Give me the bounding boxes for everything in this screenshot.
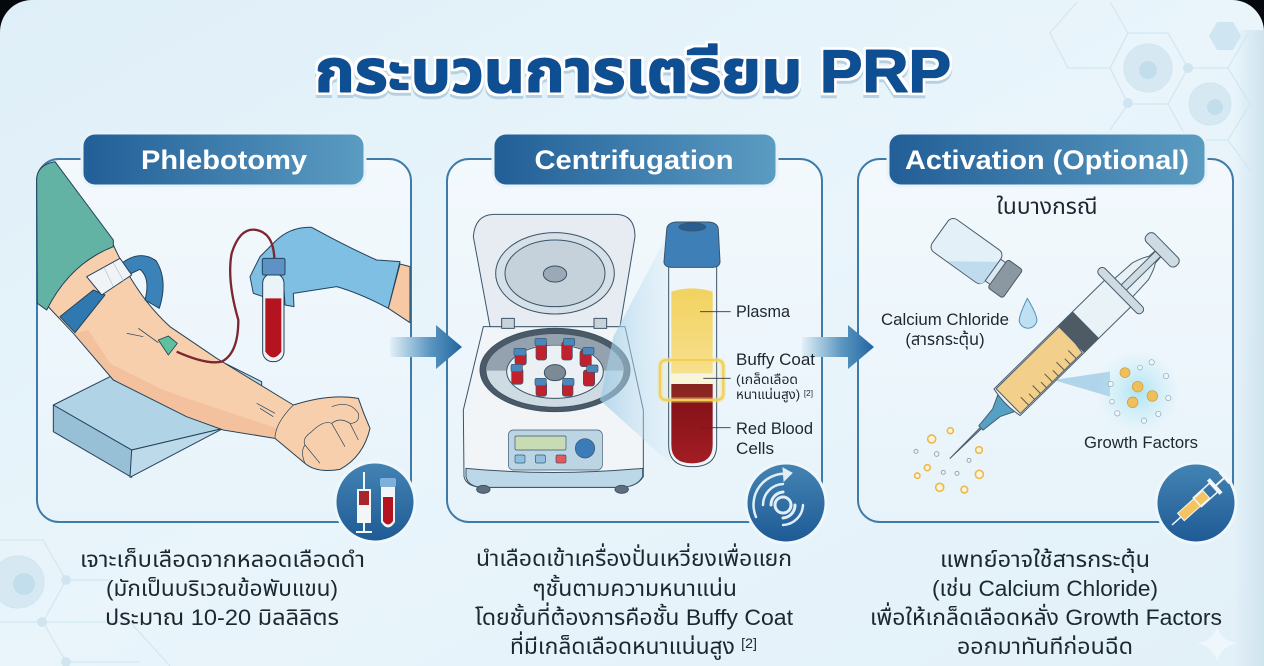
arm <box>47 245 370 470</box>
heading pill: Phlebotomy <box>82 133 365 186</box>
label: in some cases: ในบางกรณี <box>996 194 1098 219</box>
illustration: vial and syringe <box>914 216 1188 493</box>
blood collection tube <box>262 258 285 362</box>
label: Buffy Coat: หนาแน่นสูง) <box>736 387 799 402</box>
caption: phlebotomy: (มักเป็นบริเวณข้อพับแขน) <box>106 576 338 601</box>
caption: phlebotomy: เจาะเก็บเลือดจากหลอดเลือดดำ <box>80 546 365 572</box>
caption: activation: ออกมาทันทีก่อนฉีด <box>957 634 1133 659</box>
scattered growth factors <box>915 428 983 493</box>
caption: activation: แพทย์อาจใช้สารกระตุ้น <box>940 547 1150 573</box>
panel: activation <box>858 159 1236 543</box>
tourniquet <box>60 256 163 333</box>
hexagon cell pattern: bottom left <box>0 540 170 666</box>
heading pill: Centrifugation: Centrifugation <box>534 145 734 175</box>
growth factor glow <box>1097 350 1180 433</box>
label: Calcium Chloride: Calcium Chloride <box>881 311 1009 329</box>
label: Growth Factors: Growth Factors <box>1084 434 1198 452</box>
icon: spin badge <box>746 463 826 543</box>
gloved hand <box>250 227 400 308</box>
caption: phlebotomy <box>80 546 365 630</box>
hexagon cell pattern: top right <box>1050 2 1264 170</box>
panel: phlebotomy <box>37 159 415 542</box>
heading pill: Centrifugation <box>493 133 777 186</box>
forearm of clinician <box>388 264 410 323</box>
label: Plasma: Plasma <box>736 303 791 321</box>
caption: centrifugation: นำเลือดเข้าเครื่องปั่นเหวี่ยงเพื่อแยก <box>476 543 792 571</box>
syringe <box>929 224 1188 480</box>
centrifuge body <box>463 327 643 493</box>
label: Red Blood Cells <box>736 420 813 458</box>
panel: centrifugation <box>447 159 826 543</box>
rotor sample tubes <box>511 338 598 396</box>
caption: centrifugation: [2] <box>741 635 757 651</box>
vial <box>928 216 1024 300</box>
centrifuge lid <box>473 214 635 328</box>
fist knuckle lines <box>127 333 359 463</box>
icon: syringe badge <box>1156 463 1236 543</box>
caption: activation: (เช่น Calcium Chloride) <box>932 576 1158 601</box>
separated blood tube <box>664 222 720 467</box>
control panel <box>508 430 602 470</box>
rotor bowl <box>480 328 630 412</box>
illustration: centrifuge and tube <box>463 214 731 493</box>
butterfly needle <box>138 328 177 355</box>
decorative sparkle <box>1196 626 1238 662</box>
label: Buffy Coat <box>736 351 815 402</box>
zoom beam to growth factors <box>1053 372 1110 397</box>
arrow: phlebotomy to centrifugation <box>390 325 462 369</box>
title: กระบวนการเตรียม PRP <box>315 38 951 105</box>
arrow: centrifugation to activation <box>802 325 874 369</box>
label: Red Blood Cells: Cells <box>736 440 774 458</box>
buffy coat highlight <box>660 360 723 400</box>
zoom beam <box>600 230 670 463</box>
caption: centrifugation: ที่มีเกล็ดเลือดหนาแน่นสูง <box>510 634 732 659</box>
label: Calcium Chloride <box>881 311 1009 349</box>
caption: activation: เพื่อให้เกล็ดเลือดหลั่ง Growth Factors <box>870 602 1222 630</box>
label: Red Blood Cells: Red Blood <box>736 420 813 438</box>
drop <box>1019 298 1037 328</box>
heading pill: Phlebotomy: Phlebotomy <box>141 145 307 175</box>
tube cap <box>664 222 720 267</box>
label: Calcium Chloride: (สารกระตุ้น) <box>905 331 985 349</box>
caption: centrifugation: โดยชั้นที่ต้องการคือชั้น Buffy Coat <box>475 602 794 630</box>
icon: blood tube and syringe badge <box>335 462 415 542</box>
label: Buffy Coat: Buffy Coat <box>736 351 815 369</box>
heading pill: Activation (Optional) <box>888 133 1206 186</box>
caption: activation <box>870 547 1222 659</box>
illustration: arm with blood draw <box>37 162 410 477</box>
sleeve <box>37 162 113 310</box>
blood tubing <box>177 230 274 362</box>
caption: centrifugation <box>475 543 794 661</box>
caption: phlebotomy: ประมาณ 10-20 มิลลิลิตร <box>105 605 339 630</box>
arm rest pillow <box>53 363 262 477</box>
label: Buffy Coat: (เกล็ดเลือด <box>736 372 798 387</box>
caption: centrifugation: ๆชั้นตามความหนาแน่น <box>532 574 737 601</box>
heading pill: Activation (Optional): Activation (Optional) <box>905 145 1189 175</box>
label: Buffy Coat: [2] <box>804 389 813 398</box>
